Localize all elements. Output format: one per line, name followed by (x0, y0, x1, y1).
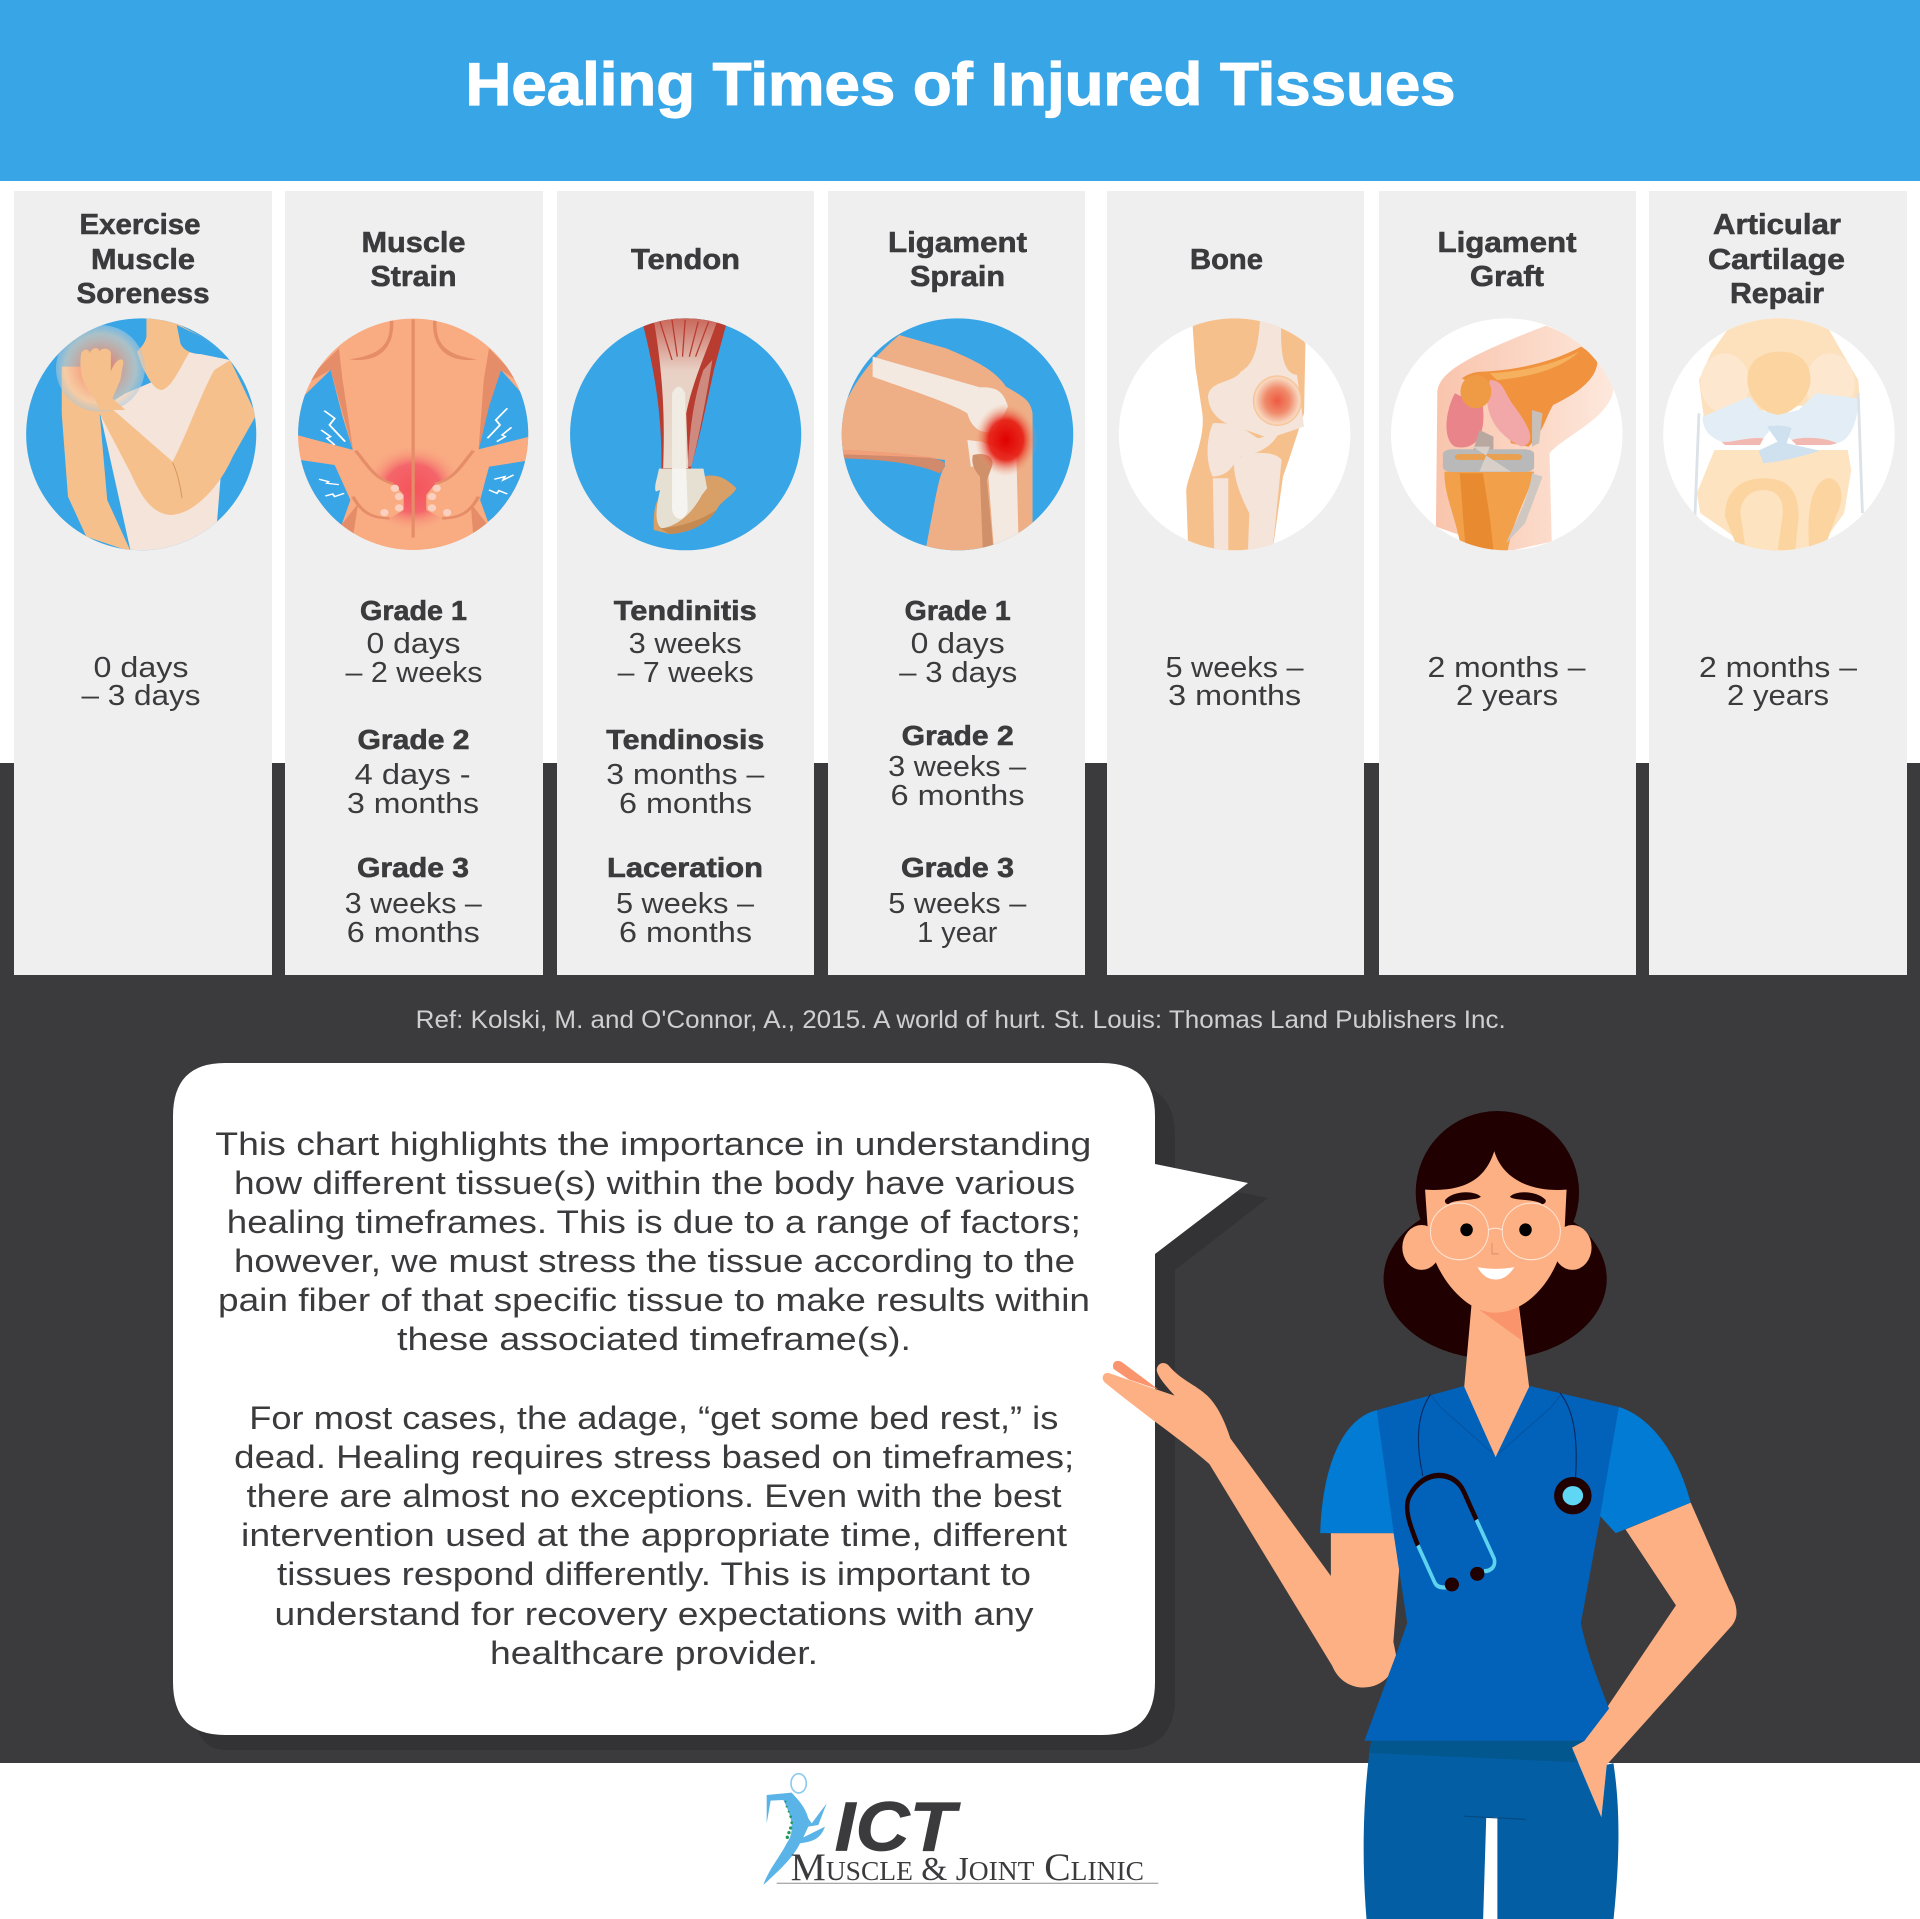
grade 1: Grade 1 (905, 595, 1011, 626)
column values: articular cartilage repair (1699, 652, 1858, 712)
heading: Soreness (76, 278, 210, 310)
column values: exercise muscle soreness (82, 652, 200, 712)
heading: Repair (1730, 278, 1824, 310)
paragraph 2: healthcare provider. (490, 1635, 818, 1671)
eyes (1460, 1223, 1532, 1236)
tendinosis (606, 724, 765, 820)
eyebrows (1445, 1192, 1546, 1204)
trousers (1364, 1741, 1618, 1919)
logo: MUSCLE & JOINT CLINIC (791, 1845, 1144, 1889)
tendinitis (614, 595, 757, 689)
heading: Exercise (80, 209, 200, 241)
paragraph 1 (215, 1126, 1091, 1357)
hair (1384, 1111, 1607, 1359)
laceration: 6 months (619, 917, 752, 949)
column values: tendon (606, 595, 765, 949)
paragraph 1: healing timeframes. This is due to a range of factors; (227, 1204, 1081, 1240)
collar lines (1430, 1395, 1560, 1453)
grade 2 (888, 720, 1027, 812)
column values: articular cartilage repair: 2 months – (1699, 652, 1858, 684)
paragraph 1: however, we must stress the tissue according to the (234, 1243, 1075, 1279)
scrub top (1364, 1386, 1619, 1741)
heading (888, 227, 1027, 293)
laceration: 5 weeks – (616, 888, 755, 920)
grade 2: Grade 2 (358, 724, 470, 755)
grade 3: 3 weeks – (345, 888, 483, 920)
grade 1: – 3 days (899, 657, 1017, 689)
grade 1 (899, 595, 1017, 689)
column values: muscle strain (345, 595, 483, 949)
tendinosis: Tendinosis (606, 724, 764, 755)
paragraph 2: For most cases, the adage, “get some bed rest,” is (249, 1400, 1058, 1436)
grade 2: 4 days - (355, 759, 471, 791)
heading: Graft (1470, 261, 1544, 293)
heading (1708, 209, 1845, 310)
tendinosis: 6 months (619, 788, 752, 820)
nurse character (1103, 1111, 1737, 1919)
column values: exercise muscle soreness: 0 days (94, 652, 188, 684)
paragraph 2: tissues respond differently. This is important to (277, 1556, 1031, 1592)
grade 3 (888, 852, 1027, 949)
column values: bone: 5 weeks – (1166, 652, 1304, 684)
heading (76, 209, 210, 310)
column values: ligament graft: 2 months – (1428, 652, 1586, 684)
ears (1402, 1225, 1592, 1270)
reference line: Ref: Kolski, M. and O'Connor, A., 2015. A world of hurt. St. Louis: Thomas Land Publishers Inc. (416, 1006, 1506, 1034)
icon: running figure (763, 1774, 827, 1885)
panel: muscle strain (285, 191, 543, 975)
grade 1 (346, 595, 482, 689)
grade 3 (345, 852, 483, 949)
column values: bone: 3 months (1168, 680, 1301, 712)
icon: shoulder pain (21, 313, 262, 553)
panel: bone (1107, 191, 1364, 975)
sleeves (1320, 1407, 1691, 1533)
dark background band (0, 763, 1920, 1763)
panel: ligament graft (1379, 191, 1636, 975)
heading: Tendon (631, 244, 740, 276)
paragraph 2: intervention used at the appropriate time, different (241, 1517, 1067, 1553)
left arm and raised hand (1103, 1361, 1399, 1687)
grade 3: Grade 3 (357, 852, 469, 883)
column values: exercise muscle soreness: – 3 days (82, 680, 200, 712)
icon: knee graft (1391, 318, 1623, 552)
paragraph 1: pain fiber of that specific tissue to make results within (218, 1282, 1090, 1318)
logo (763, 1774, 1158, 1889)
grade 1: Grade 1 (360, 595, 467, 626)
glasses (1430, 1203, 1560, 1260)
panel: articular cartilage repair (1649, 191, 1907, 975)
paragraph 1: how different tissue(s) within the body have various (234, 1165, 1075, 1201)
icon: knee sprain (834, 313, 1080, 553)
title: Healing Times of Injured Tissues (466, 51, 1456, 118)
grade 2: 6 months (890, 780, 1024, 812)
grade 2: Grade 2 (902, 720, 1014, 751)
heading: Cartilage (1708, 244, 1845, 276)
column values: articular cartilage repair: 2 years (1727, 680, 1829, 712)
paragraph 2: there are almost no exceptions. Even with the best (246, 1478, 1062, 1514)
laceration: Laceration (607, 852, 763, 883)
speech bubble (173, 1063, 1248, 1735)
column values: ligament sprain (888, 595, 1027, 949)
grade 3: 1 year (917, 917, 998, 949)
icon: cartilage (1663, 313, 1895, 552)
icon: bone leg (1119, 313, 1350, 552)
right arm (1572, 1503, 1737, 1817)
column values: ligament graft (1428, 652, 1586, 712)
icon: achilles tendon (565, 313, 805, 553)
grade 2: 3 weeks – (888, 751, 1027, 783)
column values: bone (1166, 652, 1304, 712)
logo text: ICT (835, 1788, 961, 1866)
heading (1438, 227, 1577, 293)
paragraph 2: understand for recovery expectations with any (274, 1596, 1034, 1632)
tendinitis: 3 weeks (629, 628, 742, 660)
face (1425, 1151, 1567, 1313)
heading: Strain (370, 261, 456, 293)
grade 3: 6 months (347, 917, 480, 949)
grade 3: Grade 3 (901, 852, 1014, 883)
nose (1492, 1243, 1499, 1254)
grade 2: 3 months (347, 788, 479, 820)
heading: Bone (1190, 244, 1263, 276)
speech bubble shadow (193, 1083, 1268, 1750)
grade 3: 5 weeks – (888, 888, 1027, 920)
paragraph 1: these associated timeframe(s). (397, 1321, 911, 1357)
tendinitis: Tendinitis (614, 595, 757, 626)
paragraph 1: This chart highlights the importance in understanding (215, 1126, 1091, 1162)
grade 1: 0 days (911, 628, 1005, 660)
header band (0, 0, 1920, 181)
stethoscope (1407, 1393, 1592, 1591)
grade 2 (347, 724, 479, 820)
tendinosis: 3 months – (606, 759, 765, 791)
heading: Ligament (1438, 227, 1577, 259)
smile (1478, 1267, 1514, 1280)
paragraph 2 (234, 1400, 1074, 1671)
grade 1: – 2 weeks (346, 657, 482, 689)
heading: Muscle (362, 227, 466, 259)
panel: ligament sprain (828, 191, 1085, 975)
heading: Sprain (910, 261, 1005, 293)
heading (362, 227, 466, 293)
panel: exercise muscle soreness (14, 191, 272, 975)
neck (1464, 1305, 1530, 1461)
column values: ligament graft: 2 years (1456, 680, 1558, 712)
panel: tendon (557, 191, 814, 975)
tendinitis: – 7 weeks (618, 657, 754, 689)
paragraph 2: dead. Healing requires stress based on timeframes; (234, 1439, 1074, 1475)
heading: Ligament (888, 227, 1027, 259)
heading: Articular (1713, 209, 1841, 241)
heading: Muscle (91, 244, 195, 276)
icon: lower back pain (293, 313, 533, 553)
grade 1: 0 days (366, 628, 460, 660)
laceration (607, 852, 763, 949)
